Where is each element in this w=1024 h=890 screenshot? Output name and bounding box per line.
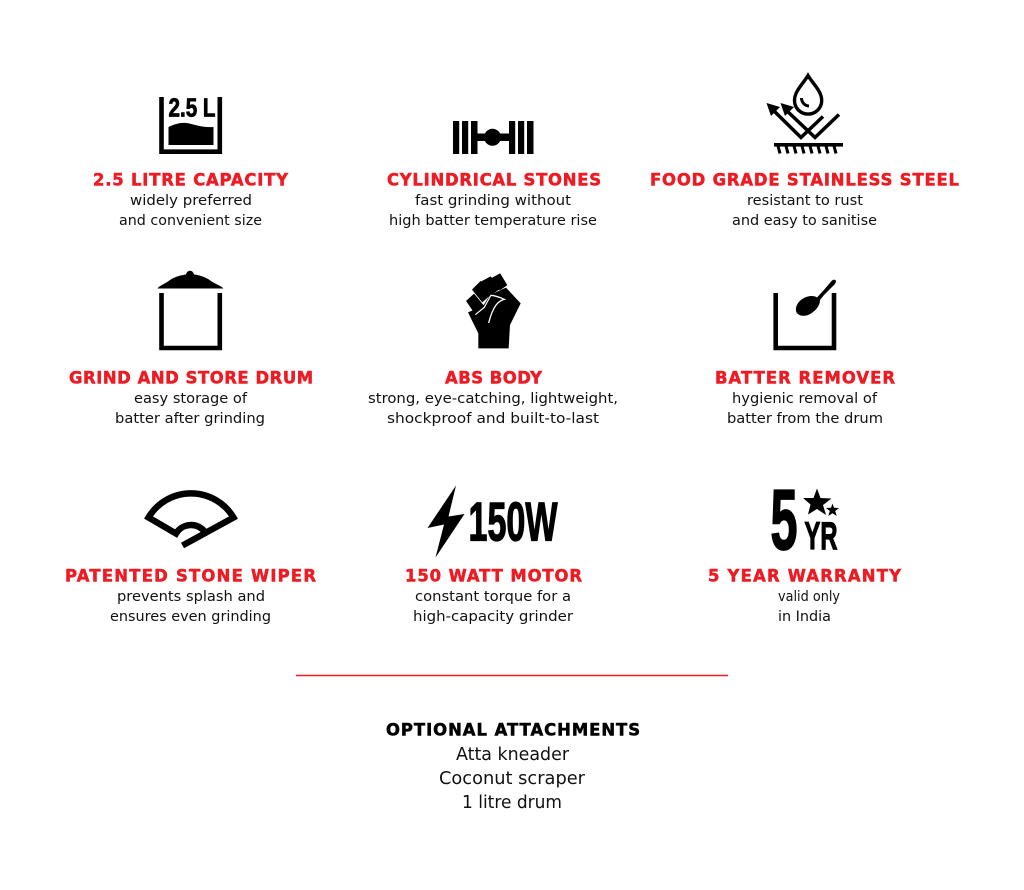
description <box>110 589 271 625</box>
description <box>778 589 840 625</box>
description: in India <box>778 609 831 625</box>
attachments list <box>439 745 586 813</box>
icon: cylindrical stones <box>453 121 534 154</box>
description: shockproof and built-to-last <box>387 411 599 427</box>
icon: raised fist <box>467 274 521 348</box>
description: strong, eye-catching, lightweight, <box>368 391 618 407</box>
description <box>727 391 883 427</box>
description: high-capacity grinder <box>413 609 573 625</box>
panel: 150 watt motor <box>405 486 582 625</box>
heading: FOOD GRADE STAINLESS STEEL <box>650 170 959 190</box>
icon: spoon in drum <box>776 280 836 348</box>
attachments list: 1 litre drum <box>462 793 562 813</box>
description: fast grinding without <box>415 193 571 209</box>
icon: 2.5 L container: 2.5 L <box>168 94 216 122</box>
description: hygienic removal of <box>732 391 878 407</box>
panel: grind and store drum <box>69 271 313 427</box>
icon: lightning bolt with 150W: 150W <box>468 490 558 552</box>
icon: 5 YR with stars: 5 <box>770 473 798 568</box>
description: ensures even grinding <box>110 609 271 625</box>
heading: 150 WATT MOTOR <box>405 566 582 586</box>
heading: CYLINDRICAL STONES <box>387 170 601 190</box>
description <box>115 391 265 427</box>
description: easy storage of <box>134 391 248 407</box>
panel: cylindrical stones <box>387 121 601 229</box>
panel: 2.5 litre capacity <box>93 94 289 229</box>
panel: optional attachments <box>386 720 640 813</box>
description: and convenient size <box>119 213 262 229</box>
panel: patented stone wiper <box>65 493 316 625</box>
description: constant torque for a <box>415 589 571 605</box>
heading: GRIND AND STORE DRUM <box>69 368 313 388</box>
description: and easy to sanitise <box>732 213 877 229</box>
description: high batter temperature rise <box>389 213 597 229</box>
heading: 5 YEAR WARRANTY <box>708 566 902 586</box>
description: widely preferred <box>130 193 252 209</box>
description: batter from the drum <box>727 411 883 427</box>
icon: lightning bolt with 150W <box>428 486 558 558</box>
panel: food grade stainless steel <box>650 76 959 229</box>
description: batter after grinding <box>115 411 265 427</box>
icon: 2.5 L container <box>162 94 220 152</box>
heading: PATENTED STONE WIPER <box>65 566 316 586</box>
description <box>368 391 618 427</box>
heading: BATTER REMOVER <box>715 368 895 388</box>
description <box>119 193 262 229</box>
icon: drum with lid <box>158 271 224 348</box>
icon: 5 YR with stars <box>770 473 839 568</box>
description <box>413 589 573 625</box>
panel: 5 year warranty <box>708 473 902 625</box>
description: resistant to rust <box>747 193 863 209</box>
description: valid only <box>778 589 840 605</box>
description: prevents splash and <box>117 589 265 605</box>
icon: 5 YR with stars: YR <box>804 515 838 558</box>
description <box>732 193 877 229</box>
heading: ABS BODY <box>445 368 543 388</box>
heading: OPTIONAL ATTACHMENTS <box>386 720 640 740</box>
description <box>389 193 597 229</box>
attachments list: Coconut scraper <box>439 769 586 789</box>
panel: batter remover <box>715 280 895 427</box>
icon: fan-shaped wiper <box>148 493 234 546</box>
attachments list: Atta kneader <box>456 745 570 765</box>
heading: 2.5 LITRE CAPACITY <box>93 170 289 190</box>
panel: ABS body <box>368 274 618 427</box>
icon: drop repelled by steel surface <box>766 76 843 154</box>
